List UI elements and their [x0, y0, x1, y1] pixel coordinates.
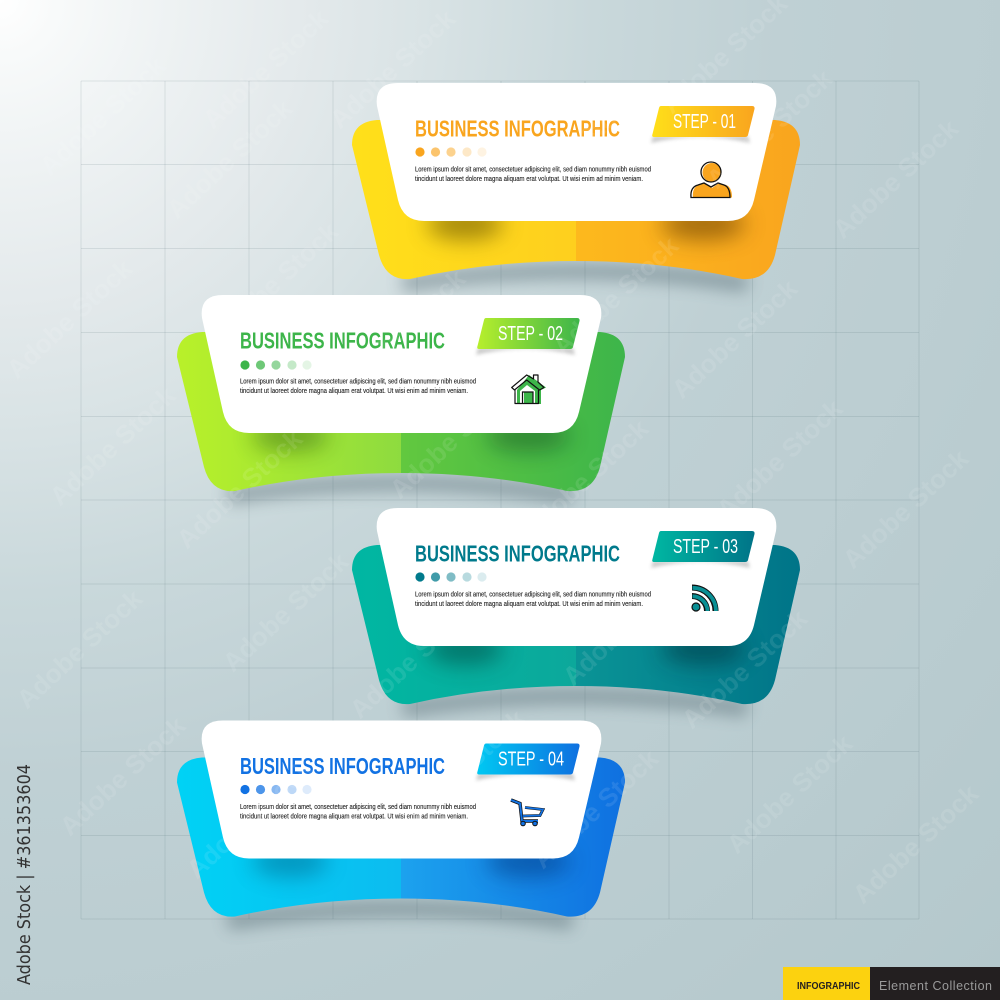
- icon: shopping cart: [511, 800, 543, 826]
- heading: step 01: BUSINESS INFOGRAPHIC: [415, 116, 620, 142]
- ribbon shape: step 03: [352, 545, 800, 717]
- text: Adobe Stock: [507, 83, 644, 214]
- text: Adobe Stock: [207, 216, 344, 347]
- step tag: step 03: STEP - 03: [673, 536, 738, 558]
- text: Adobe Stock: [827, 113, 964, 244]
- body text: step 01: tincidunt ut laoreet dolore magna aliquam erat volutpat. Ut wisi enim ad minim veniam.: [415, 174, 643, 183]
- body text: step 02: tincidunt ut laoreet dolore magna aliquam erat volutpat. Ut wisi enim ad minim veniam.: [240, 386, 468, 395]
- panel: step 04: [177, 720, 625, 930]
- text: Adobe Stock: [666, 273, 803, 404]
- body text: step 01: Lorem ipsum dolor sit amet, consectetuer adipiscing elit, sed diam nonummy nibh euismod: [415, 164, 651, 174]
- progress dots: step 01: [415, 147, 487, 157]
- progress dots: step 02: [240, 360, 312, 370]
- step tag: step 02: [476, 318, 580, 355]
- step tag: step 04: [476, 744, 580, 780]
- text: Adobe Stock: [557, 560, 694, 691]
- text: Adobe Stock: [161, 93, 298, 224]
- text: Adobe Stock: [711, 393, 848, 524]
- step tag: step 01: STEP - 01: [673, 111, 736, 133]
- body text: step 03: [415, 590, 651, 608]
- icon: person: [691, 162, 732, 198]
- text: Adobe Stock: [344, 593, 481, 724]
- white card: step 04: [202, 720, 601, 858]
- body text: step 02: Lorem ipsum dolor sit amet, consectetuer adipiscing elit, sed diam nonummy nibh euismod: [240, 376, 476, 386]
- ribbon shape: step 02: [177, 332, 625, 504]
- panel: step 01: [352, 83, 800, 292]
- text: Adobe Stock: [34, 50, 171, 181]
- text: Adobe Stock: [197, 3, 334, 134]
- step tag: step 02: STEP - 02: [498, 323, 563, 345]
- text: Adobe Stock: [701, 63, 838, 194]
- ribbon shape: step 04: [177, 758, 625, 930]
- text: Adobe Stock: [54, 710, 191, 841]
- heading: step 02: BUSINESS INFOGRAPHIC: [240, 328, 445, 354]
- body text: step 04: [240, 802, 476, 820]
- heading: step 04: BUSINESS INFOGRAPHIC: [240, 753, 445, 779]
- text: Adobe Stock: [217, 546, 354, 677]
- body text: step 01: [415, 164, 651, 183]
- text: Adobe Stock: [384, 373, 521, 504]
- footer badge: Element Collection: [879, 979, 992, 993]
- progress dots: step 04: [240, 785, 312, 794]
- panel: step 03: [352, 508, 800, 717]
- text: Adobe Stock: [11, 583, 148, 714]
- step tag: step 01: [651, 106, 755, 143]
- text: Adobe Stock: [181, 753, 318, 884]
- body text: step 04: tincidunt ut laoreet dolore magna aliquam erat volutpat. Ut wisi enim ad minim veniam.: [240, 812, 468, 820]
- text: Adobe Stock: [517, 413, 654, 544]
- text: Adobe Stock: [847, 778, 984, 909]
- text: Adobe Stock: [171, 423, 308, 554]
- text: Adobe Stock: [1, 253, 138, 384]
- step tag: step 04: STEP - 04: [498, 748, 564, 770]
- stock id caption: Adobe Stock | #361353604: [14, 764, 35, 985]
- panel: step 02: [177, 295, 625, 504]
- white card: step 03: [377, 508, 776, 646]
- body text: step 03: tincidunt ut laoreet dolore magna aliquam erat volutpat. Ut wisi enim ad minim veniam.: [415, 599, 643, 608]
- text: Adobe Stock: [721, 728, 858, 859]
- body text: step 03: Lorem ipsum dolor sit amet, consectetuer adipiscing elit, sed diam nonummy nibh euismod: [415, 590, 651, 598]
- icon: signal: [692, 588, 716, 611]
- step tag: step 03: [651, 531, 755, 568]
- footer badge: INFOGRAPHIC: [797, 980, 860, 992]
- text: Adobe Stock: [44, 380, 181, 511]
- text: Adobe Stock: [547, 230, 684, 361]
- body text: step 02: [240, 376, 476, 395]
- white card: step 01: [377, 83, 776, 221]
- white card: step 02: [202, 295, 601, 433]
- footer badge: [783, 967, 1000, 1000]
- icon: house: [512, 375, 546, 404]
- ribbon shape: step 01: [352, 120, 800, 292]
- text: Adobe Stock: [837, 443, 974, 574]
- text: Adobe Stock: [394, 703, 531, 834]
- progress dots: step 03: [415, 572, 487, 582]
- body text: step 04: Lorem ipsum dolor sit amet, consectetuer adipiscing elit, sed diam nonummy nibh euismod: [240, 802, 476, 811]
- text: Adobe Stock: [334, 263, 471, 394]
- text: Adobe Stock: [527, 743, 664, 874]
- heading: step 03: BUSINESS INFOGRAPHIC: [415, 540, 620, 566]
- text: Adobe Stock: [676, 603, 813, 734]
- text: Adobe Stock: [324, 3, 461, 134]
